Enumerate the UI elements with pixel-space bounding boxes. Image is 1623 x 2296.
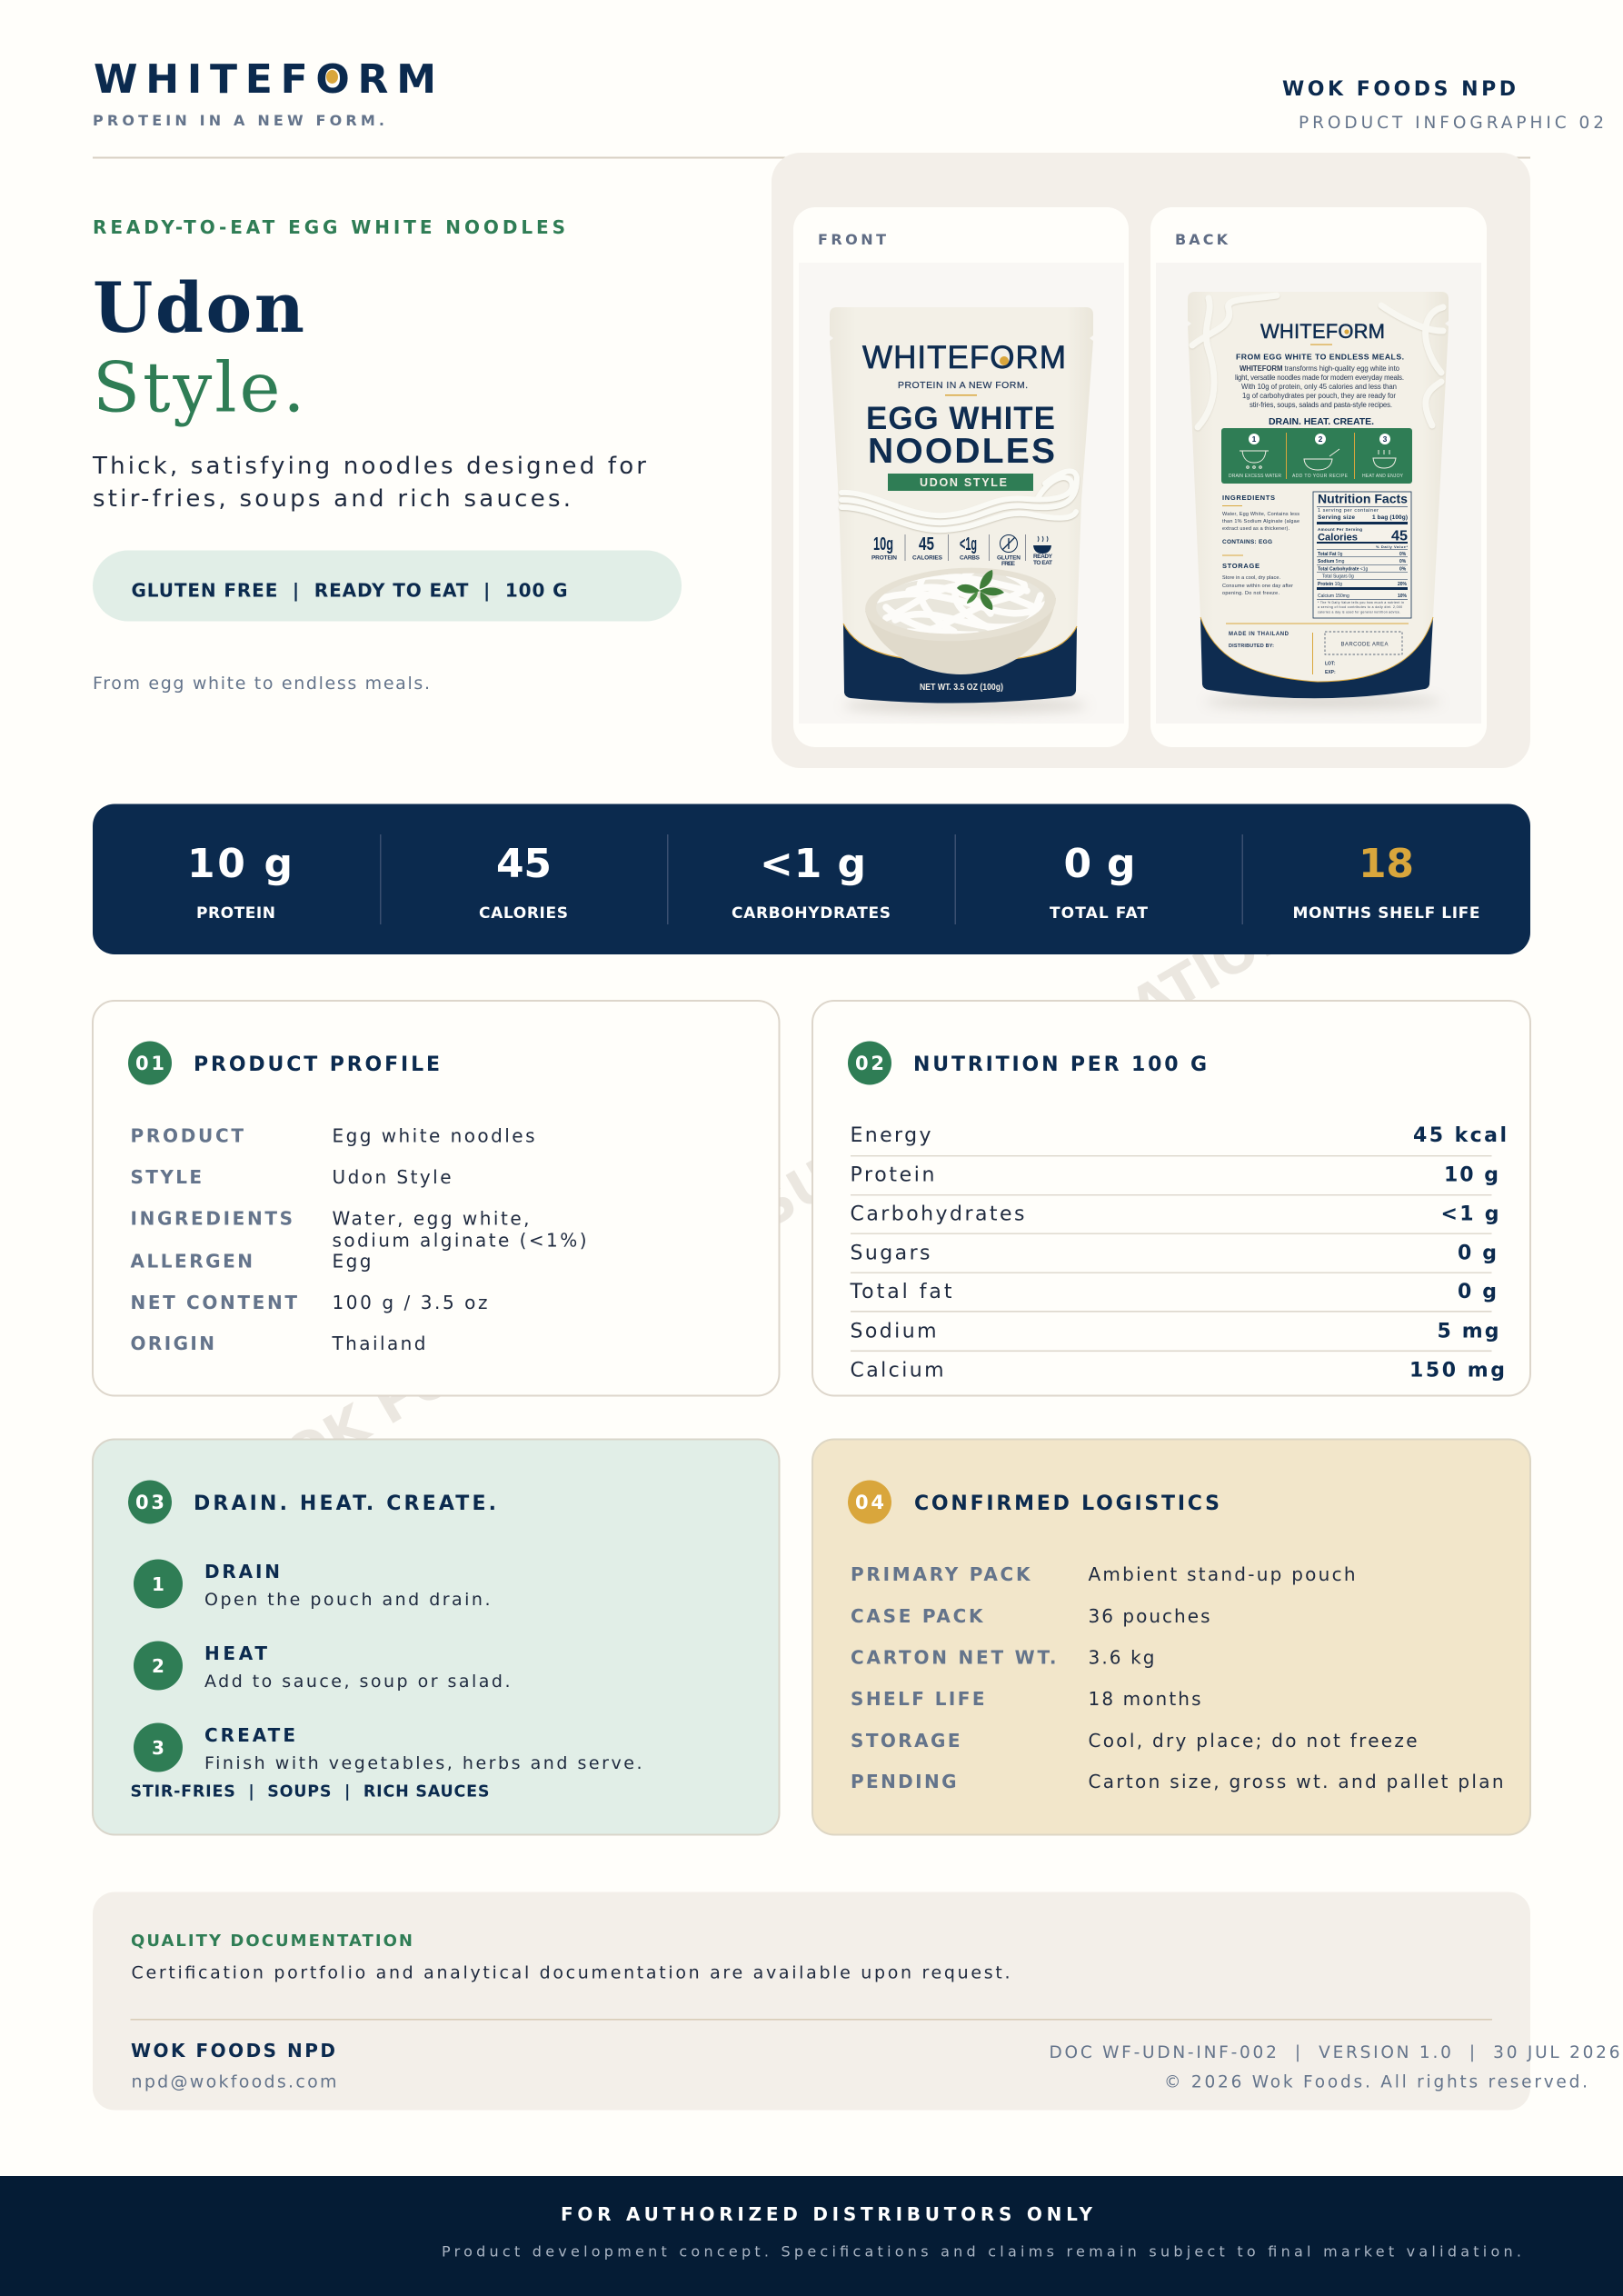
icon: back pouch illustration: HEAT AND ENJOY bbox=[1362, 474, 1404, 479]
title: Style. bbox=[93, 347, 305, 427]
nutrition facts label: 1 bag (100g) bbox=[1372, 514, 1408, 521]
icon: back pouch illustration: stir-fries, soups, salads and pasta-style recipes. bbox=[1250, 401, 1392, 409]
watermark: WOK FOODS bbox=[224, 1280, 575, 1518]
document info: © 2026 Wok Foods. All rights reserved. bbox=[1164, 2072, 1588, 2092]
badge 02 bbox=[848, 1042, 891, 1085]
footer bar bbox=[0, 2176, 1623, 2296]
stat: carbohydrates: <1 g bbox=[760, 841, 866, 887]
icon: back pouch illustration: 2 bbox=[1319, 434, 1323, 444]
nutrient values: 150 mg bbox=[1409, 1360, 1505, 1382]
icon: back pouch illustration: FROM EGG WHITE TO ENDLESS MEALS. bbox=[1236, 353, 1404, 362]
values: Cool, dry place; do not freeze bbox=[1089, 1730, 1418, 1752]
nutrition facts label: Total Carbohydrate <1g bbox=[1318, 567, 1369, 573]
heading: CONFIRMED LOGISTICS bbox=[914, 1492, 1220, 1515]
step 3: CREATE bbox=[204, 1724, 295, 1746]
icon: back pouch illustration bbox=[1188, 292, 1449, 708]
stat: shelf life bbox=[1292, 841, 1479, 923]
icon: front pouch illustration: 45 bbox=[919, 534, 934, 554]
nutrition facts label: calories a day is used for general nutrition advice. bbox=[1318, 611, 1400, 614]
panel 01: product profile bbox=[93, 1001, 780, 1396]
nutrition facts label: 0% bbox=[1399, 559, 1407, 564]
icon: back pouch illustration: DISTRIBUTED BY: bbox=[1229, 644, 1274, 649]
contact: npd@wokfoods.com bbox=[131, 2072, 336, 2092]
icon: front pouch illustration: 10g bbox=[873, 534, 893, 554]
icon: egg yolk in logo O bbox=[326, 70, 338, 84]
watermark bbox=[224, 894, 1308, 1518]
icon: back pouch illustration: 1 bbox=[1252, 434, 1257, 444]
step 3: Finish with vegetables, herbs and serve. bbox=[204, 1753, 642, 1773]
stat: total fat: TOTAL FAT bbox=[1050, 904, 1148, 923]
icon: back pouch illustration: INGREDIENTS bbox=[1222, 494, 1275, 502]
icon: front pouch illustration: PROTEIN bbox=[871, 554, 897, 562]
nutrition facts label bbox=[1313, 492, 1411, 618]
values: sodium alginate (<1%) bbox=[333, 1229, 587, 1251]
slogan: From egg white to endless meals. bbox=[93, 674, 430, 694]
header: right brand block: WOK FOODS NPD bbox=[1282, 78, 1516, 101]
nutrition facts label: Total Fat 0g bbox=[1318, 552, 1343, 557]
heading: NUTRITION PER 100 G bbox=[913, 1053, 1207, 1076]
panel 03: drain heat create bbox=[93, 1440, 780, 1834]
contact bbox=[131, 2040, 336, 2092]
labels: SHELF LIFE bbox=[851, 1688, 985, 1710]
title bbox=[93, 267, 305, 427]
document info: DOC WF-UDN-INF-002 | VERSION 1.0 | 30 JUL 2026 bbox=[1049, 2043, 1619, 2062]
stat: protein bbox=[187, 841, 293, 923]
step 2: Add to sauce, soup or salad. bbox=[204, 1672, 511, 1692]
nutrition facts label: Amount Per Serving bbox=[1318, 527, 1362, 532]
nutrition facts label: 0% bbox=[1399, 552, 1407, 557]
step 1 bbox=[134, 1560, 491, 1610]
icon: back pouch illustration: ADD TO YOUR RECIPE bbox=[1292, 474, 1349, 479]
footer bar: Product development concept. Specifications and claims remain subject to final market validation. bbox=[442, 2243, 1521, 2260]
stat: calories bbox=[479, 841, 568, 923]
description text bbox=[92, 453, 646, 513]
description text: Thick, satisfying noodles designed for bbox=[92, 453, 646, 480]
statement: Certification portfolio and analytical documentation are available upon request. bbox=[131, 1963, 1010, 1983]
values: Thailand bbox=[331, 1333, 425, 1354]
icon: back pouch illustration: 1g of carbohydrates per pouch, they are ready for bbox=[1242, 392, 1396, 400]
icon: back pouch illustration: Store in a cool, dry place. bbox=[1222, 575, 1280, 581]
nutrition facts label: Total Sugars 0g bbox=[1322, 574, 1354, 580]
description text: stir-fries, soups and rich sauces. bbox=[93, 485, 571, 513]
labels bbox=[131, 1125, 297, 1354]
icon: back pouch illustration: CONTAINS: EGG bbox=[1222, 539, 1272, 545]
values: 36 pouches bbox=[1089, 1605, 1210, 1627]
nutrition facts label: Nutrition Facts bbox=[1318, 493, 1408, 505]
icon: front pouch illustration: NOODLES bbox=[868, 432, 1055, 471]
heading: PRODUCT PROFILE bbox=[194, 1053, 440, 1076]
stat: protein: 10 g bbox=[187, 841, 293, 887]
icon: front pouch illustration: GLUTEN bbox=[997, 554, 1021, 562]
stat: carbohydrates bbox=[732, 841, 891, 923]
nutrition facts label: Calcium 150mg bbox=[1318, 594, 1349, 599]
icon: back pouch illustration: BARCODE AREA bbox=[1341, 642, 1389, 647]
stat: shelf life: 18 bbox=[1359, 841, 1414, 887]
nutrition facts label: Protein 10g bbox=[1318, 582, 1342, 587]
labels bbox=[851, 1563, 1056, 1792]
icon: back pouch illustration: extract used as a thickener). bbox=[1222, 526, 1289, 532]
nutrition facts label: 1 serving per container bbox=[1318, 508, 1379, 514]
stat: calories: CALORIES bbox=[479, 904, 568, 923]
tagline: PROTEIN IN A NEW FORM. bbox=[93, 112, 384, 129]
header: right brand block bbox=[1282, 78, 1604, 133]
nutrition facts label: 10% bbox=[1398, 594, 1408, 599]
badge 01: 01 bbox=[135, 1053, 164, 1074]
nutrient values: <1 g bbox=[1441, 1203, 1499, 1225]
header: right brand block: PRODUCT INFOGRAPHIC 02 bbox=[1299, 114, 1604, 133]
icon: back pouch illustration: STORAGE bbox=[1222, 562, 1260, 570]
labels: PENDING bbox=[851, 1771, 956, 1792]
values: 18 months bbox=[1089, 1688, 1201, 1710]
labels: PRODUCT bbox=[131, 1125, 244, 1147]
labels: STORAGE bbox=[851, 1730, 960, 1752]
heading: QUALITY DOCUMENTATION bbox=[131, 1932, 413, 1951]
step 1: Open the pouch and drain. bbox=[204, 1590, 491, 1610]
icon: back pouch illustration: DRAIN. HEAT. CREATE. bbox=[1269, 416, 1374, 427]
icon: front pouch illustration: READY bbox=[1033, 554, 1053, 560]
icon: back pouch illustration: than 1% Sodium Alginate (algae bbox=[1222, 519, 1299, 524]
watermark: SU bbox=[743, 1147, 844, 1241]
badge 04 bbox=[848, 1480, 891, 1523]
panel 04: confirmed logistics bbox=[812, 1440, 1530, 1834]
values: Udon Style bbox=[333, 1166, 451, 1188]
step 1: 1 bbox=[152, 1573, 164, 1595]
values: Egg white noodles bbox=[333, 1125, 534, 1147]
step 2 bbox=[134, 1642, 511, 1692]
nutrient names: Sugars bbox=[851, 1242, 931, 1265]
icon: front pouch illustration: FREE bbox=[1001, 561, 1016, 567]
icon: front pouch illustration bbox=[830, 307, 1093, 713]
labels: CASE PACK bbox=[851, 1605, 984, 1627]
badge 02: 02 bbox=[855, 1053, 884, 1074]
nutrition facts label: % Daily Value* bbox=[1376, 544, 1408, 549]
stat: shelf life: MONTHS SHELF LIFE bbox=[1292, 904, 1479, 923]
nutrition facts label: Serving size bbox=[1318, 514, 1355, 521]
nutrient values: 0 g bbox=[1458, 1242, 1497, 1265]
labels: NET CONTENT bbox=[131, 1292, 297, 1313]
nutrient values bbox=[1409, 1124, 1507, 1382]
title: Udon bbox=[93, 267, 304, 348]
icon: back pouch illustration: 3 bbox=[1383, 434, 1388, 444]
badge 01 bbox=[128, 1042, 172, 1085]
labels: INGREDIENTS bbox=[131, 1207, 293, 1229]
panel: quality documentation bbox=[93, 1892, 1619, 2111]
nutrient names: Sodium bbox=[851, 1320, 936, 1343]
contact: WOK FOODS NPD bbox=[131, 2040, 335, 2061]
nutrition facts label: Sodium 5mg bbox=[1318, 559, 1345, 564]
nutrient values: 5 mg bbox=[1438, 1320, 1499, 1343]
icon: front pouch illustration: PROTEIN IN A NEW FORM. bbox=[898, 380, 1028, 391]
icon: back pouch illustration: Consume within one day after bbox=[1222, 584, 1293, 589]
nutrition facts label: a serving of food contributes to a daily diet. 2,000 bbox=[1318, 605, 1402, 609]
stat: total fat bbox=[1050, 841, 1148, 923]
badge 03 bbox=[128, 1480, 172, 1523]
pill: product attributes: GLUTEN FREE | READY TO EAT | 100 G bbox=[131, 580, 567, 602]
values bbox=[1089, 1563, 1503, 1792]
icon: front pouch illustration: CALORIES bbox=[912, 554, 943, 562]
step 3: 3 bbox=[152, 1737, 164, 1759]
nutrition facts label: 20% bbox=[1398, 582, 1408, 587]
nutrient names: Energy bbox=[851, 1124, 931, 1147]
values: 100 g / 3.5 oz bbox=[333, 1292, 487, 1313]
eyebrow heading: READY-TO-EAT EGG WHITE NOODLES bbox=[93, 216, 565, 238]
stat: protein: PROTEIN bbox=[196, 904, 275, 923]
step 3 bbox=[134, 1723, 642, 1773]
icon: back pouch illustration: With 10g of protein, only 45 calories and less than bbox=[1241, 383, 1397, 391]
icon: back pouch illustration: light, versatile noodles made for modern everyday meals. bbox=[1235, 374, 1404, 382]
labels: STYLE bbox=[131, 1166, 202, 1188]
stats band bbox=[93, 804, 1530, 954]
panel 02: nutrition per 100 g bbox=[812, 1001, 1530, 1396]
nutrition facts label: Calories bbox=[1318, 533, 1358, 544]
values bbox=[331, 1125, 587, 1354]
nutrient names: Protein bbox=[851, 1163, 934, 1187]
icon: front pouch illustration: NET WT. 3.5 OZ (100g) bbox=[920, 682, 1003, 693]
footer bar: FOR AUTHORIZED DISTRIBUTORS ONLY bbox=[561, 2203, 1093, 2225]
labels: CARTON NET WT. bbox=[851, 1647, 1056, 1669]
nutrition facts label: * The % Daily Value tells you how much a nutrient in bbox=[1318, 601, 1404, 604]
values: Ambient stand-up pouch bbox=[1089, 1563, 1356, 1585]
stat: calories: 45 bbox=[496, 841, 552, 887]
nutrient values: 0 g bbox=[1458, 1281, 1497, 1303]
nutrient names: Calcium bbox=[851, 1360, 943, 1382]
labels: ALLERGEN bbox=[131, 1251, 253, 1273]
icon: back pouch illustration: Water, Egg White, Contains less bbox=[1222, 512, 1299, 517]
step 1: DRAIN bbox=[204, 1561, 280, 1582]
icon: back pouch illustration: EXP: bbox=[1325, 670, 1336, 675]
document info bbox=[1049, 2043, 1619, 2092]
step 2: 2 bbox=[152, 1655, 164, 1677]
nutrient values: 10 g bbox=[1444, 1163, 1499, 1187]
labels: ORIGIN bbox=[131, 1333, 214, 1354]
badge 04: 04 bbox=[855, 1492, 884, 1513]
labels: PRIMARY PACK bbox=[851, 1563, 1031, 1585]
nutrient names: Carbohydrates bbox=[851, 1203, 1025, 1225]
values: 3.6 kg bbox=[1089, 1647, 1154, 1669]
stat: total fat: 0 g bbox=[1063, 841, 1136, 887]
icon: back pouch illustration: DRAIN EXCESS WATER bbox=[1229, 474, 1281, 479]
icon: front pouch illustration: CARBS bbox=[960, 554, 981, 562]
card: front of pouch: FRONT bbox=[818, 231, 886, 248]
heading: DRAIN. HEAT. CREATE. bbox=[194, 1492, 496, 1515]
icon: back pouch illustration: opening. Do not freeze. bbox=[1222, 591, 1279, 596]
icon: front pouch illustration: EGG WHITE bbox=[866, 401, 1055, 436]
uses line: STIR-FRIES | SOUPS | RICH SAUCES bbox=[131, 1783, 489, 1802]
icon: front pouch illustration: <1g bbox=[960, 534, 977, 554]
header: brand logo: WHITEFORM bbox=[94, 56, 436, 103]
nutrient values: 45 kcal bbox=[1413, 1124, 1507, 1147]
icon: front pouch illustration: UDON STYLE bbox=[920, 476, 1007, 489]
icon: back pouch illustration: LOT: bbox=[1325, 662, 1335, 667]
values: Carton size, gross wt. and pallet plan bbox=[1089, 1771, 1503, 1792]
card: front of pouch bbox=[793, 207, 1129, 747]
icon: front pouch illustration: TO EAT bbox=[1033, 560, 1052, 566]
values: Egg bbox=[333, 1251, 371, 1273]
badge 03: 03 bbox=[135, 1492, 164, 1513]
nutrition facts label: 45 bbox=[1391, 529, 1408, 544]
icon: back pouch illustration: WHITEFORM bbox=[1260, 320, 1385, 343]
icon: back pouch illustration: MADE IN THAILAND bbox=[1229, 632, 1289, 637]
pill: product attributes bbox=[93, 551, 682, 622]
card: back of pouch: BACK bbox=[1175, 231, 1229, 248]
icon: front pouch illustration: WHITEFORM bbox=[862, 340, 1066, 375]
stat: carbohydrates: CARBOHYDRATES bbox=[732, 904, 891, 923]
icon: back pouch illustration: WHITEFORM transforms high-quality egg white into bbox=[1240, 364, 1400, 373]
panel: product images bbox=[772, 153, 1530, 768]
values: Water, egg white, bbox=[333, 1207, 529, 1229]
nutrition facts label: 0% bbox=[1399, 567, 1407, 573]
card: back of pouch bbox=[1150, 207, 1487, 747]
nutrient names: Total fat bbox=[849, 1281, 952, 1303]
watermark: ATION bbox=[1120, 894, 1308, 1039]
nutrient names bbox=[849, 1124, 1025, 1382]
step 2: HEAT bbox=[204, 1642, 267, 1664]
